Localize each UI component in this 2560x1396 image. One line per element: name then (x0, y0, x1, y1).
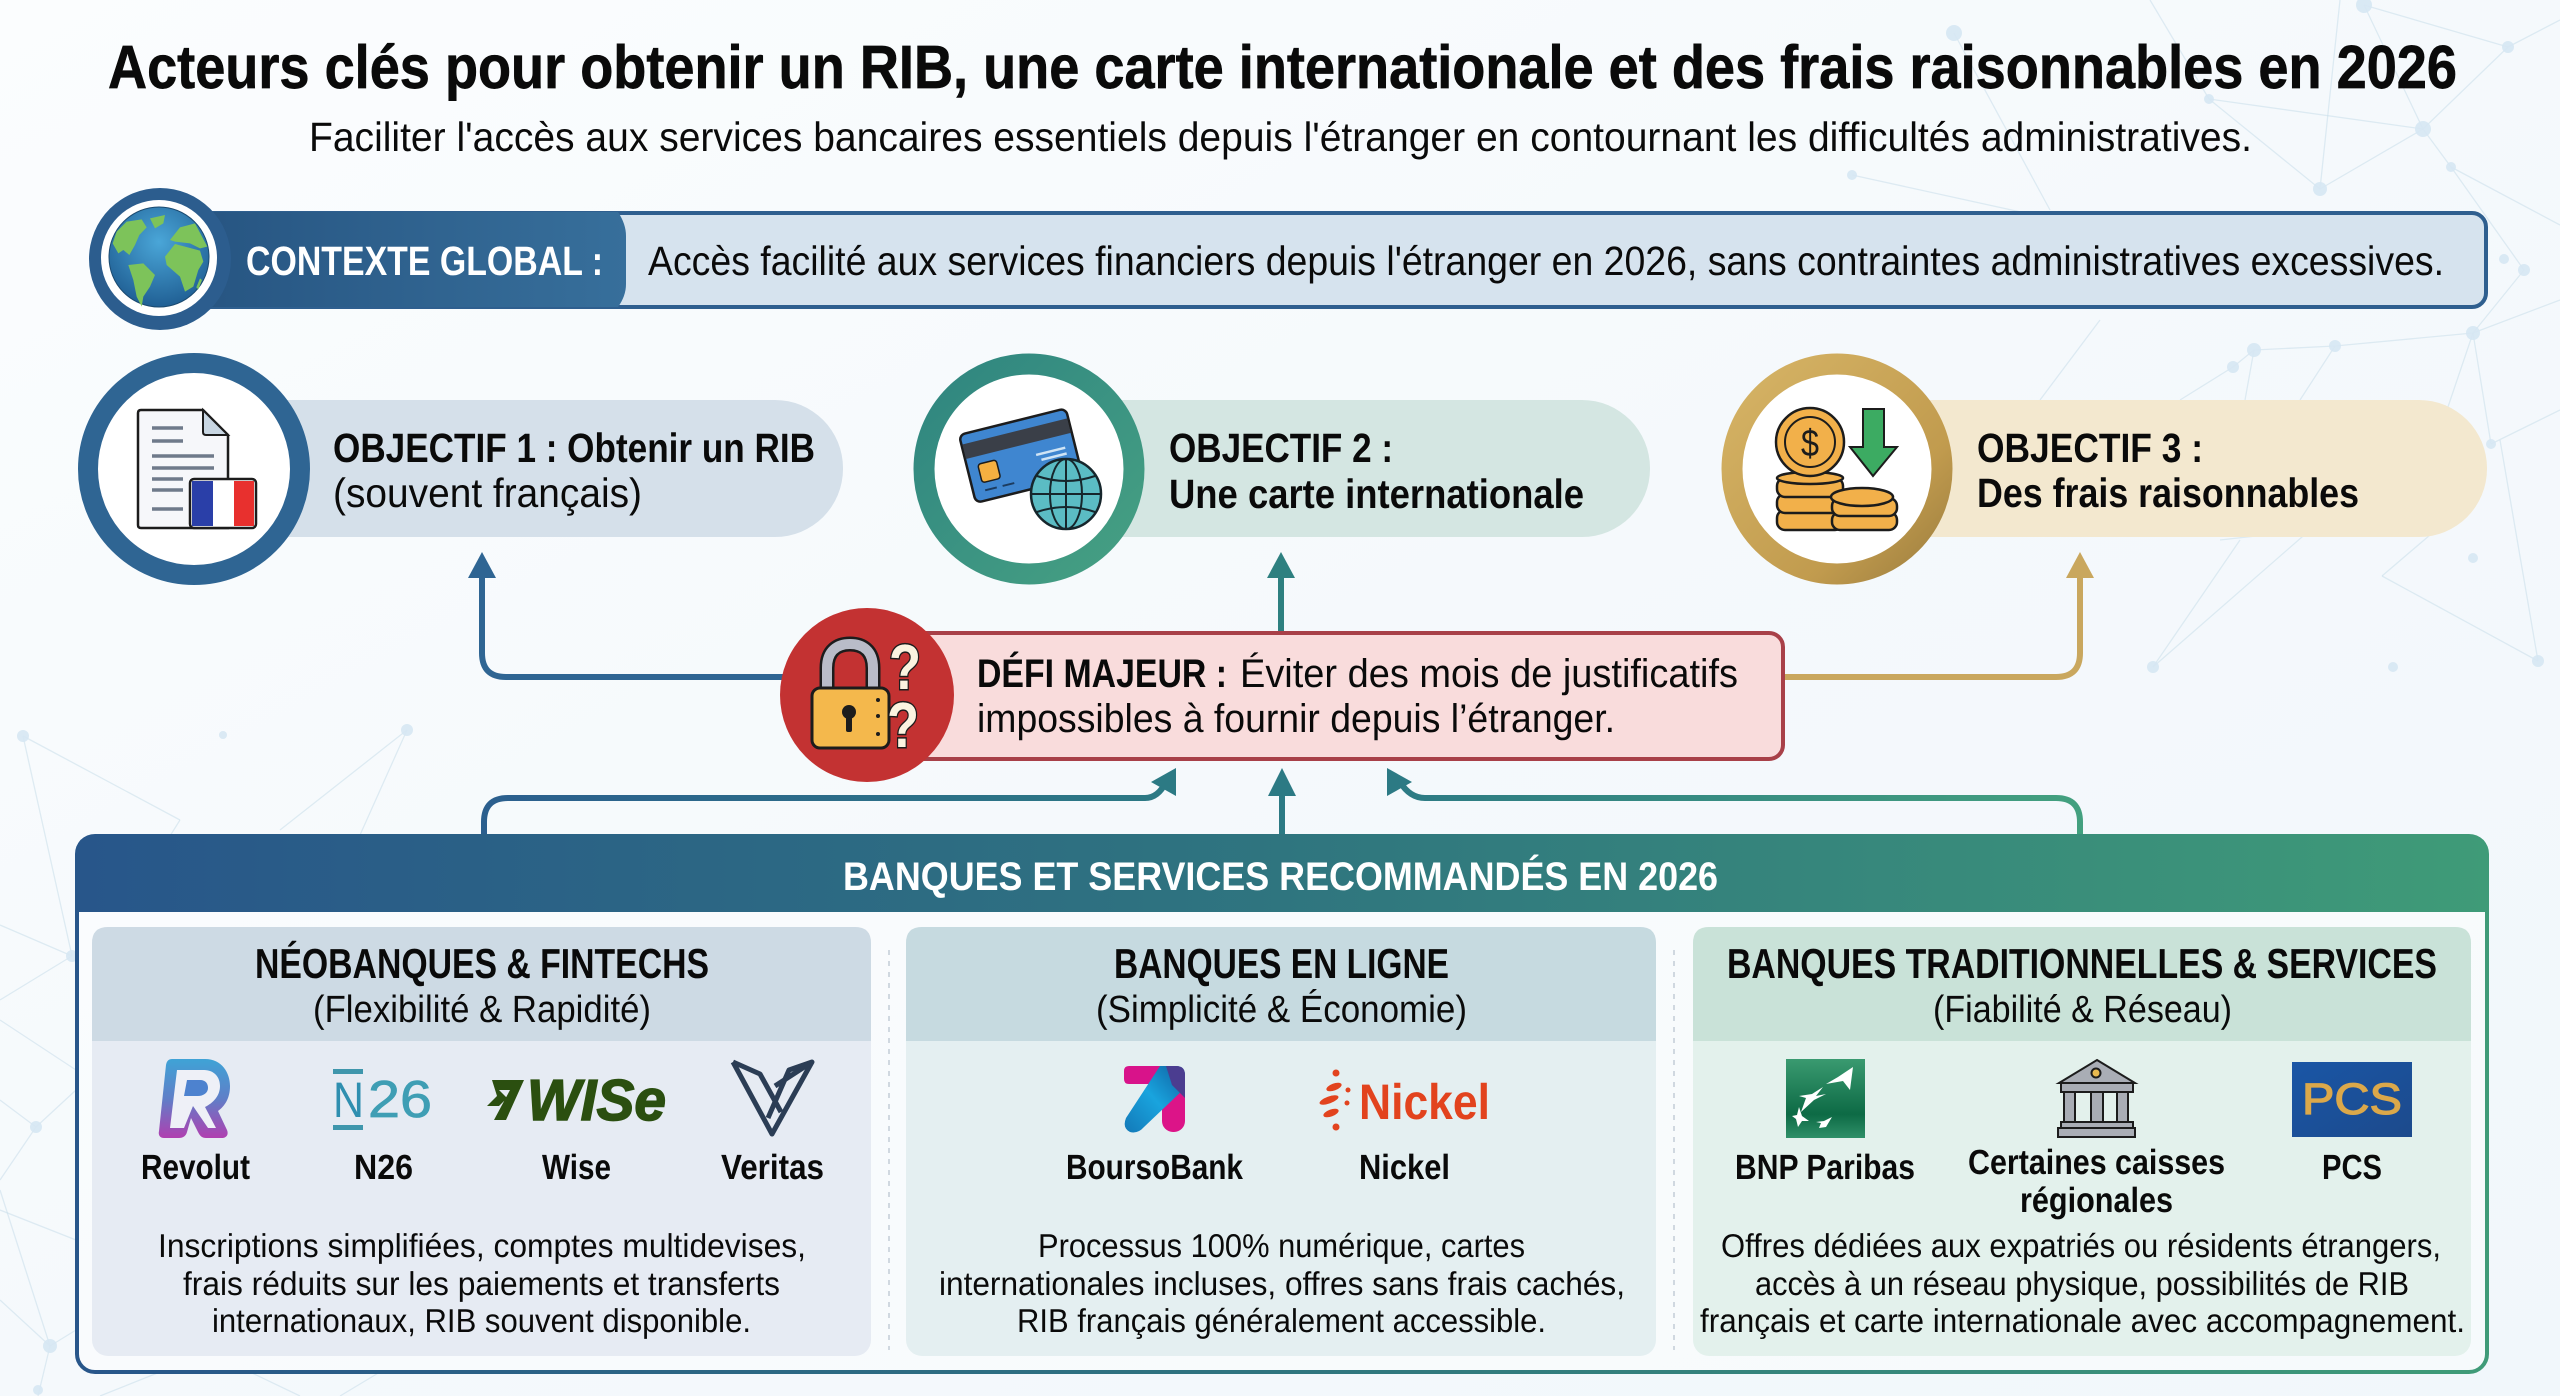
label: Revolut: Revolut (141, 1148, 250, 1187)
icon: padlock with question marks: ? (887, 689, 919, 761)
column: banques traditionnelles (1693, 927, 2471, 1356)
column header (1693, 927, 2471, 1041)
arrow: services to defi left (484, 768, 1176, 838)
column heading: BANQUES EN LIGNE (1114, 940, 1449, 987)
column subheading: (Simplicité & Économie) (1096, 989, 1467, 1031)
panel: banques et services (76, 835, 2488, 1372)
panel: objectif 3 (1732, 364, 2487, 574)
context bar (150, 213, 2486, 307)
band title: BANQUES ET SERVICES RECOMMANDÉS EN 2026 (843, 854, 1718, 899)
objective 2 heading: OBJECTIF 2 : (1169, 425, 1393, 471)
objective 3 text: Des frais raisonnables (1977, 470, 2359, 516)
icon: coins and down arrow (1732, 364, 1942, 574)
column subheading: (Flexibilité & Rapidité) (313, 989, 651, 1031)
column heading: NÉOBANQUES & FINTECHS (255, 940, 709, 987)
icon: document with French flag (88, 363, 300, 575)
panel: defi majeur (780, 608, 1783, 782)
column description: RIB français généralement accessible. (1017, 1302, 1546, 1339)
network pattern bottom left (0, 724, 413, 1396)
objective 3 heading: OBJECTIF 3 : (1977, 425, 2203, 471)
label: Certaines caisses régionales (1968, 1143, 2225, 1220)
context label text: CONTEXTE GLOBAL : (246, 238, 603, 284)
column: néobanques (92, 927, 871, 1356)
label: Certaines caisses régionales: Certaines caisses (1968, 1143, 2225, 1182)
column body (1693, 927, 2471, 1356)
arrow: services to defi right (1387, 768, 2080, 838)
panel: objectif 1 (88, 363, 843, 575)
logo: Revolut (159, 1059, 230, 1138)
defi text line 1: Éviter des mois de justificatifs (1240, 652, 1738, 696)
logo: N26: N (333, 1072, 364, 1128)
column description: Processus 100% numérique, cartes (1038, 1227, 1525, 1264)
context label block (150, 212, 626, 307)
logo: Veritas (733, 1062, 812, 1134)
label: Veritas: Veritas (721, 1148, 824, 1187)
column description (939, 1227, 1625, 1339)
column description: accès à un réseau physique, possibilités de RIB (1755, 1265, 2409, 1302)
icon: padlock with question marks (780, 608, 954, 782)
defi label: DÉFI MAJEUR : (977, 651, 1227, 696)
column subheading: (Fiabilité & Réseau) (1933, 989, 2232, 1031)
divider right (1673, 950, 1675, 1350)
divider left (888, 950, 890, 1350)
objective 1 heading: OBJECTIF 1 : Obtenir un RIB (333, 425, 815, 471)
icon: bank card with globe (924, 364, 1134, 574)
objective 2 text: Une carte internationale (1169, 471, 1584, 517)
pill 1 (194, 400, 843, 537)
logo: N26 (333, 1069, 432, 1130)
column description: internationales incluses, offres sans frais cachés, (939, 1265, 1625, 1302)
context description: Accès facilité aux services financiers depuis l'étranger en 2026, sans contraintes administratives excessives. (648, 238, 2444, 284)
arrow: defi to objectif 3 (1784, 552, 2094, 677)
network pattern top right (1847, 0, 2560, 673)
logo: BNP Paribas (1786, 1059, 1865, 1138)
label: PCS: PCS (2322, 1148, 2382, 1187)
pill 3 (1837, 400, 2487, 537)
defi text line 2: impossibles à fournir depuis l’étranger. (977, 697, 1615, 741)
icon: globe (89, 188, 231, 330)
column: banques en ligne (906, 927, 1656, 1356)
logo: Nickel (1318, 1070, 1490, 1130)
column description: frais réduits sur les paiements et transferts (183, 1265, 780, 1302)
band header (76, 835, 2488, 912)
logo: N26: 26 (368, 1071, 432, 1129)
arrow: defi to objectif 1 (468, 552, 790, 677)
panel outline (77, 836, 2487, 1372)
arrow: services to defi centre (1268, 768, 1296, 838)
panel: contexte global (89, 188, 2486, 330)
logo: Wise: WISe (527, 1068, 666, 1133)
column header (906, 927, 1656, 1041)
label: Certaines caisses régionales: régionales (2020, 1181, 2173, 1220)
label: Wise: Wise (542, 1148, 611, 1187)
pill 2 (1029, 400, 1650, 537)
column body (92, 927, 871, 1356)
icon: padlock with question marks: ? (889, 631, 921, 703)
arrow: defi to objectif 2 (1267, 552, 1295, 632)
label: N26: N26 (354, 1148, 413, 1187)
column body (906, 927, 1656, 1356)
column description (158, 1227, 806, 1339)
icon: bank building (2058, 1060, 2135, 1137)
panel: objectif 2 (924, 364, 1650, 574)
icon: coins and down arrow: $ (1801, 423, 1819, 465)
column description: Offres dédiées aux expatriés ou résidents étrangers, (1721, 1227, 2441, 1264)
column description: Inscriptions simplifiées, comptes multidevises, (158, 1227, 806, 1264)
column description (1700, 1227, 2465, 1339)
logo: PCS: PCS (2302, 1075, 2402, 1124)
logo: BoursoBank (1124, 1066, 1185, 1132)
defi box (860, 633, 1783, 759)
objective 1 note: (souvent français) (333, 470, 642, 516)
subtitle: Faciliter l'accès aux services bancaires essentiels depuis l'étranger en contournant les difficultés administratives. (309, 114, 2252, 160)
label: Nickel: Nickel (1359, 1148, 1450, 1187)
column description: internationaux, RIB souvent disponible. (212, 1302, 751, 1339)
label: BNP Paribas: BNP Paribas (1735, 1148, 1915, 1187)
logo: Nickel: Nickel (1359, 1074, 1490, 1130)
column header (92, 927, 871, 1041)
column description: français et carte internationale avec accompagnement. (1700, 1302, 2465, 1339)
logo: PCS (2292, 1062, 2412, 1137)
label: BoursoBank: BoursoBank (1066, 1148, 1243, 1187)
